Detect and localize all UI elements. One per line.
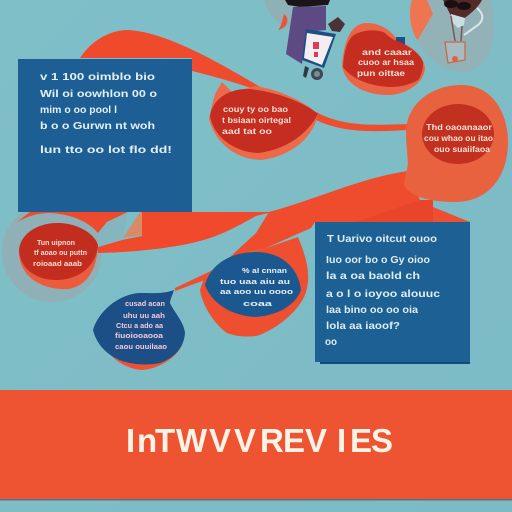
ribbon: middle left [17,212,272,253]
text: bottom left bubble copy: cusad acan [125,299,165,308]
text: center top bubble copy: couy ty oo bao [223,105,288,114]
text: lower right panel copy: lola aa iaoof? [326,321,400,332]
text: centre bubble copy: tuo uaa aiu au [220,277,291,286]
illustration: left person with tablet [264,0,345,80]
text: center top bubble copy: t bsiaan oirtegal [222,116,291,125]
text: centre bubble copy: aa aoo uu oooo [220,287,294,296]
text: right bubble copy: ouo suaiifaoa [434,145,491,154]
text: upper left panel copy: v 1 100 oimblo bio [40,72,155,83]
text: lower right panel copy: Iuo oor bo o Gy oioo [326,255,430,266]
text: bottom left bubble copy: uhu uu aah [123,311,165,320]
bubble: center top red [209,82,318,160]
text: center top bubble copy: aad tat oo [222,127,272,136]
text: upper left panel copy: Wil oi oowhlon 00 o [40,89,157,100]
panel: upper left text box [18,59,192,212]
shape: grey circle behind left bubble [2,202,102,302]
bubble: right orange with red centre [404,85,508,202]
text: upper left panel copy: mim o oo pool l [40,105,117,116]
shape: teal leaf fold [98,212,128,247]
text: lower right panel copy [325,234,441,348]
title: InTWVVREVIES [126,422,393,459]
bubble: left red [19,223,98,289]
text: centre bubble copy: coaa [243,299,273,308]
text: centre bubble copy: % aI cnnan [242,266,287,275]
text: right bubble copy: cou whao ou itao [424,134,493,143]
text: center top bubble copy [222,105,291,136]
illustration: right person with badge [410,0,494,72]
text: upper left panel copy: b o o Gurwn nt woh [40,121,155,132]
text: upper right bubble copy: pun oittae [357,69,406,78]
bubble: upper right red [342,23,425,95]
panel: lower right text box [315,222,470,364]
text: left bubble copy: roioaad aaab [33,259,82,268]
text: bottom left bubble copy: caou ouuilaao [115,342,167,351]
text: lower right panel copy: a o l o ioyoo alouuc [326,289,441,300]
title banner [0,390,512,500]
text: lower right panel copy: la a oa baold ch [326,271,420,282]
text: centre bubble copy [220,266,294,308]
text: upper right bubble copy: and caaar [362,48,412,57]
text: left bubble copy: tf aoao ou puttn [34,248,87,257]
text: upper left panel copy [40,72,172,156]
text: bottom left bubble copy [115,299,167,351]
bubble: centre blue with orange crescent [200,237,308,337]
ribbon: top [80,30,408,131]
text: bottom left bubble copy: Ctcu a ado aa [116,321,164,330]
shape: tan fold [123,212,142,238]
text: lower right panel copy: oo [325,337,337,348]
text: left bubble copy: Tun uipnon [37,238,75,247]
text: upper left panel copy: lun tto oo lot flo dd! [40,145,172,156]
text: bottom left bubble copy: fiuoiooaooa [115,331,164,340]
text: left bubble copy [33,238,87,268]
text: right bubble copy [424,123,493,154]
text: lower right panel copy: T Uarivo oitcut ouoo [327,234,437,245]
ribbon: middle right [175,171,470,291]
bubble: bottom left blue [93,290,185,370]
text: lower right panel copy: laa bino oo oo oia [326,305,418,316]
text: upper right bubble copy: cuoo ar hsaa [358,58,415,67]
text: upper right bubble copy [357,48,415,78]
text: right bubble copy: Thd oaoanaaor [426,123,492,132]
